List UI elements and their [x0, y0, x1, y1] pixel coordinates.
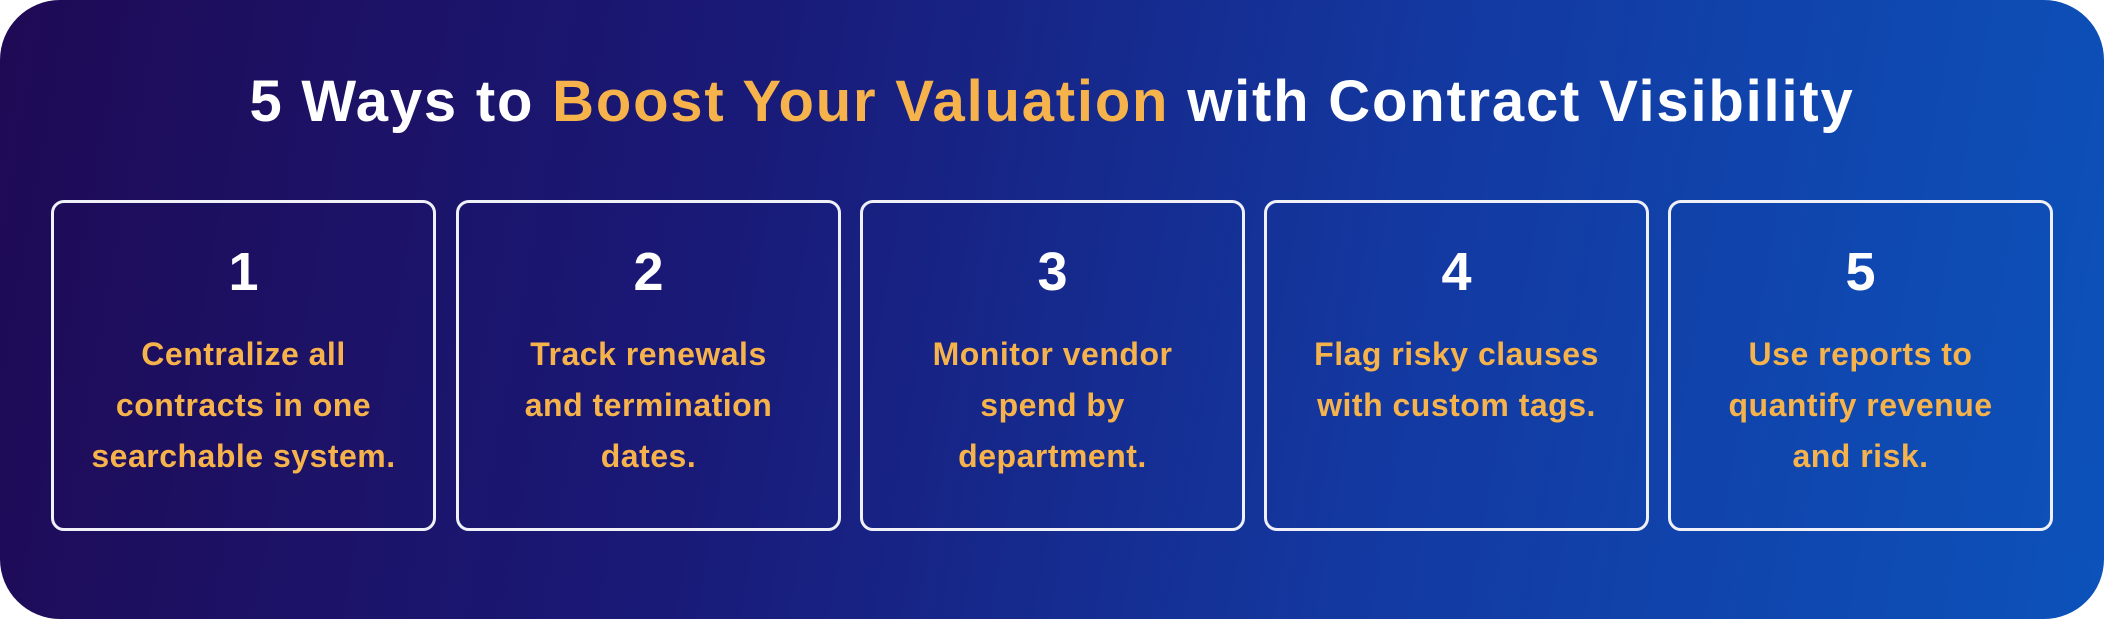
text 5: [1728, 336, 1993, 474]
text 1: [91, 336, 396, 474]
text 3: Monitor vendor: [933, 336, 1172, 372]
text 3: department.: [958, 438, 1147, 474]
text 5: and risk.: [1792, 438, 1929, 474]
text 1: contracts in one: [116, 387, 371, 423]
number 5: 5: [1845, 242, 1876, 302]
text 5: Use reports to: [1749, 336, 1972, 372]
title: 5 Ways to Boost Your Valuation with Contract Visibility: [249, 69, 1855, 134]
text 2: and termination: [525, 387, 772, 423]
card 5: [1668, 200, 2053, 531]
number 4: 4: [1441, 242, 1472, 302]
text 1: Centralize all: [141, 336, 346, 372]
text 2: [525, 336, 772, 474]
text 4: with custom tags.: [1317, 387, 1596, 423]
text 4: Flag risky clauses: [1314, 336, 1599, 372]
text 3: [933, 336, 1172, 474]
text 2: Track renewals: [530, 336, 767, 372]
card 3: [860, 200, 1245, 531]
number 1: 1: [228, 242, 259, 302]
card 1: [51, 200, 436, 531]
text 2: dates.: [601, 438, 696, 474]
text 1: searchable system.: [91, 438, 396, 474]
card 4: [1264, 200, 1649, 531]
number 3: 3: [1037, 242, 1068, 302]
text 5: quantify revenue: [1728, 387, 1993, 423]
number 2: 2: [633, 242, 664, 302]
card 2: [456, 200, 841, 531]
text 4: [1314, 336, 1599, 423]
text 3: spend by: [980, 387, 1125, 423]
